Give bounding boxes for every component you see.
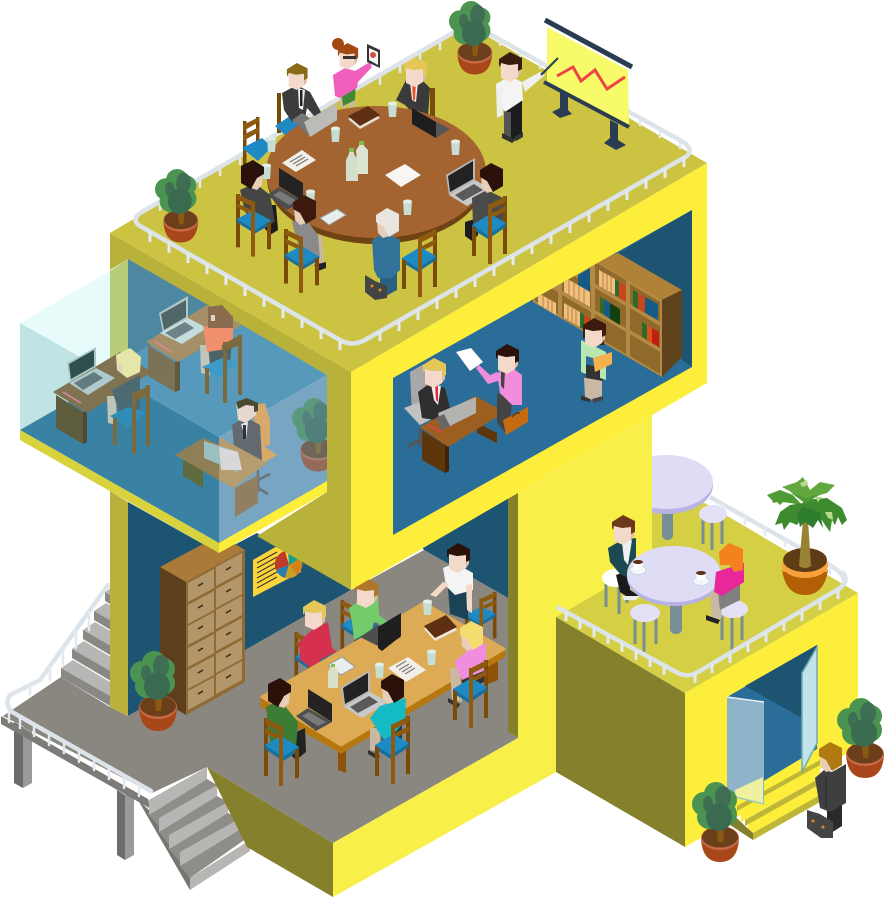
floor — [3, 550, 518, 843]
laptop: black — [412, 108, 450, 138]
chair: left desk — [110, 385, 150, 454]
chair: old man — [402, 229, 437, 297]
notebook — [424, 615, 457, 641]
chair: seated right — [472, 196, 507, 264]
briefcase: orange — [503, 407, 528, 435]
railing: stairs and landing — [7, 585, 151, 796]
desk: executive — [175, 437, 267, 517]
chair: green jacket — [264, 718, 299, 786]
stairs: upper flight — [61, 588, 110, 706]
room: glass office — [20, 259, 335, 553]
round table — [266, 106, 486, 244]
briefcase: dark — [807, 810, 833, 838]
section: roof terrace — [110, 1, 707, 372]
person: presenter — [496, 52, 558, 143]
back table — [652, 455, 713, 540]
desk: manager — [420, 396, 505, 473]
palm tree — [767, 477, 847, 595]
glass — [451, 140, 460, 155]
person: blond back view — [107, 348, 141, 425]
person: coral shirt — [200, 305, 233, 375]
document — [388, 657, 426, 682]
desk: left — [53, 352, 152, 444]
chair: executive — [240, 403, 277, 494]
plant: entrance right — [837, 698, 884, 778]
person: seated left — [240, 160, 278, 235]
glass — [375, 662, 384, 678]
plant: roof back — [449, 1, 492, 75]
chair: green shirt — [340, 600, 372, 661]
wall: upper left olive — [110, 233, 351, 590]
terrace surface — [556, 473, 858, 693]
cabinet — [160, 535, 245, 715]
laptop: dark left — [267, 168, 303, 210]
chair: back right — [430, 88, 435, 118]
chair: coral shirt — [202, 335, 242, 403]
person: old man — [372, 208, 400, 296]
chair: teal top — [375, 716, 410, 784]
laptop: silver back view — [292, 103, 337, 137]
section: yellow lower walls — [207, 415, 652, 897]
palm crown — [767, 477, 847, 532]
wall: annex front face — [685, 593, 858, 847]
person: man with briefcase — [815, 742, 846, 833]
front table — [627, 546, 721, 634]
glass — [388, 102, 397, 117]
person: woman with books — [581, 318, 612, 403]
chair: pink blouse — [453, 660, 488, 728]
railing: back posts — [160, 37, 680, 211]
books — [538, 268, 659, 347]
glass — [267, 136, 276, 152]
chair: seated woman — [284, 229, 319, 293]
section: lower room — [1, 491, 518, 890]
glass — [427, 650, 436, 665]
railing: terrace front — [557, 572, 846, 683]
entrance steps — [730, 760, 820, 840]
roof surface — [110, 24, 707, 372]
chair: back left — [275, 93, 300, 135]
person: woman with tablet — [332, 38, 380, 108]
document — [282, 150, 316, 172]
glass — [423, 600, 432, 615]
back railing — [710, 497, 844, 586]
meeting table — [262, 603, 504, 773]
paper sheet — [385, 164, 421, 187]
laptop: executive — [204, 441, 242, 472]
tablet — [320, 209, 346, 225]
bottle — [328, 664, 338, 688]
person: green shirt — [349, 578, 388, 642]
person: blond man in suit — [396, 57, 430, 117]
chair: manager — [404, 364, 440, 449]
back wall — [128, 502, 351, 716]
stool: man — [602, 569, 630, 614]
wall strip: right — [508, 493, 518, 738]
glass — [331, 126, 340, 142]
shelf cells — [535, 262, 660, 374]
chair: red shirt — [294, 632, 326, 693]
bottles — [346, 141, 368, 181]
laptop: silver — [341, 670, 388, 718]
laptop: far — [360, 613, 401, 651]
stairs: lower flight — [138, 767, 250, 890]
room: manager office — [393, 210, 692, 535]
column strip — [110, 491, 128, 716]
person: man with coffee — [608, 515, 640, 600]
glass — [403, 200, 412, 215]
person: seated right — [465, 163, 503, 241]
back stool — [699, 505, 727, 550]
desk: back — [146, 305, 242, 392]
coffee cup — [630, 560, 646, 574]
chair: far end — [465, 592, 496, 646]
chair: upper left — [242, 117, 272, 165]
pillar: left — [14, 722, 32, 788]
person: manager — [418, 358, 450, 420]
person: pink shirt — [476, 344, 522, 432]
person: man in suit — [282, 63, 322, 122]
laptop: silver right — [446, 158, 493, 206]
bookshelf — [533, 253, 682, 377]
plant: entrance left — [692, 782, 739, 862]
wall: annex left face — [556, 617, 685, 847]
briefcase: dark — [365, 275, 387, 300]
notebook — [348, 106, 380, 129]
railing: top rail — [136, 23, 690, 344]
coffee cup — [693, 571, 709, 586]
railing: front posts — [150, 157, 684, 350]
person: standing man — [430, 543, 473, 620]
office back wall — [618, 210, 692, 367]
back wall: right — [420, 497, 508, 598]
person: red shirt — [299, 600, 340, 672]
wall: upper right yellow — [351, 163, 707, 590]
person: green jacket — [266, 678, 306, 760]
person: teal top — [368, 674, 406, 760]
wall: lower bright face — [333, 415, 652, 897]
plant: behind glass — [292, 398, 327, 472]
chair: seated left — [236, 194, 271, 257]
laptop: manager — [436, 397, 476, 430]
person: seated woman — [292, 195, 326, 271]
door leaf: left — [727, 697, 764, 804]
projection board — [544, 20, 632, 150]
paper sheet — [456, 348, 483, 371]
pillar: right — [117, 790, 134, 860]
stool: woman — [718, 600, 748, 652]
person: executive — [232, 398, 262, 470]
laptop: back desk — [159, 296, 207, 344]
section: upper block — [20, 163, 707, 590]
glass — [262, 164, 271, 179]
poster: pie chart — [253, 533, 302, 597]
landing slab edge — [1, 716, 151, 809]
plant: lower room — [130, 651, 177, 731]
glass tint panes — [20, 259, 327, 553]
tablet — [328, 657, 355, 675]
doorway — [727, 645, 817, 803]
plant: roof left — [155, 169, 198, 243]
laptop: dark — [296, 689, 332, 731]
glass — [306, 190, 315, 205]
door leaf: right — [802, 647, 817, 772]
stool: front — [630, 604, 660, 652]
office floor — [393, 210, 692, 535]
person: pink blouse — [448, 621, 486, 708]
wall: lower left face — [207, 767, 333, 897]
person: woman with coffee — [706, 543, 744, 624]
section: cafe annex — [556, 455, 884, 862]
laptop: left desk — [67, 347, 115, 395]
